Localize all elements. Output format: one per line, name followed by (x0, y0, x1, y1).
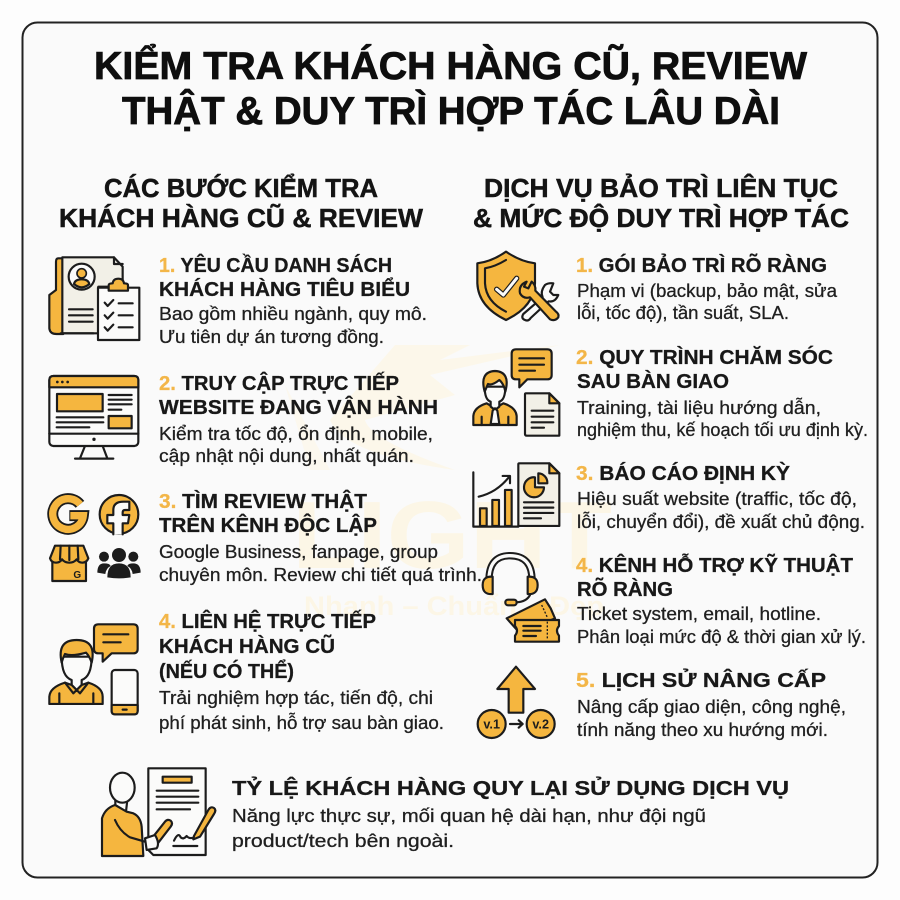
icon: upgrade arrow v1 to v2: v.1 (483, 718, 500, 732)
text: right step 2: nghiệm thu, kế hoạch tối ưu định kỳ. (577, 419, 868, 440)
icon: facebook (100, 495, 138, 534)
icon: upgrade arrow v1 to v2 (478, 667, 555, 738)
text: right step 3: 3. BÁO CÁO ĐỊNH KỲ (576, 461, 790, 485)
text: left step 1 (159, 253, 427, 347)
text: returning customers: TỶ LỆ KHÁCH HÀNG QUY LẠI SỬ DỤNG DỊCH VỤ (232, 776, 789, 800)
text: right step 4: 4. KÊNH HỖ TRỢ KỸ THUẬT (576, 553, 853, 577)
text: right step 4: Ticket system, email, hotline. (577, 603, 821, 624)
icon: upgrade arrow v1 to v2: v.2 (532, 718, 549, 732)
text: left step 2: cập nhật nội dung, nhất quán. (159, 445, 414, 466)
icon: support person with chat and document (473, 349, 559, 436)
text: left step 3: chuyên môn. Review chi tiết quá trình. (159, 564, 482, 585)
text: right step 3 (576, 461, 865, 532)
heading: left column (59, 173, 423, 233)
icon: website on monitor (49, 376, 138, 459)
text: right step 4: Phân loại mức độ & thời gian xử lý. (577, 626, 866, 647)
text: left step 4: KHÁCH HÀNG CŨ (159, 634, 335, 658)
text: left step 2: Kiểm tra tốc độ, ổn định, mobile, (159, 423, 433, 444)
text: right step 4 (576, 553, 866, 647)
text: left step 3: 3. TÌM REVIEW THẬT (159, 489, 367, 513)
heading: right column: & MỨC ĐỘ DUY TRÌ HỢP TÁC (473, 203, 849, 233)
text: left step 1: Ưu tiên dự án tương đồng. (159, 326, 384, 347)
text: right step 5: Nâng cấp giao diện, công nghệ, (577, 696, 846, 717)
text: right step 2 (576, 345, 868, 440)
text: right step 2: 2. QUY TRÌNH CHĂM SÓC (576, 345, 833, 369)
watermark: faint logo (285, 345, 612, 621)
icon: shield and tools (477, 252, 559, 321)
icon: people group (97, 548, 141, 578)
heading: right column: DỊCH VỤ BẢO TRÌ LIÊN TỤC (484, 173, 838, 203)
text: right step 1: Phạm vi (backup, bảo mật, sửa (577, 280, 838, 301)
icon: growth chart and report (473, 463, 559, 527)
text: left step 2: WEBSITE ĐANG VẬN HÀNH (159, 395, 438, 419)
icon: storefront: G (73, 570, 81, 581)
text: left step 1: Bao gồm nhiều ngành, quy mô. (159, 303, 427, 324)
text: returning customers: product/tech bên ngoài. (232, 830, 454, 851)
watermark: faint logo: LIGHT (292, 482, 612, 589)
text: right step 5: tính năng theo xu hướng mới. (577, 719, 828, 740)
text: left step 2 (159, 371, 438, 466)
text: right step 4: RÕ RÀNG (577, 577, 673, 601)
text: right step 5: 5. LỊCH SỬ NÂNG CẤP (576, 668, 826, 692)
text: right step 2: SAU BÀN GIAO (577, 370, 729, 393)
text: left step 4: (NẾU CÓ THỂ) (159, 659, 294, 683)
text: left step 3: Google Business, fanpage, group (159, 541, 438, 562)
watermark: faint logo: Nhanh – Chuẩn – Đẹp (304, 591, 604, 621)
text: returning customers: Năng lực thực sự, mối quan hệ dài hạn, như đội ngũ (232, 805, 706, 826)
text: left step 4 (159, 609, 444, 733)
text: left step 3: TRÊN KÊNH ĐỘC LẬP (159, 513, 377, 537)
text: returning customers (232, 776, 789, 851)
title: THẬT & DUY TRÌ HỢP TÁC LÂU DÀI (122, 89, 780, 133)
text: right step 1: lỗi, tốc độ), tần suất, SLA. (577, 302, 789, 323)
icon: person signing document (102, 768, 215, 856)
text: right step 3: Hiệu suất website (traffic, tốc độ, (577, 488, 857, 509)
title (94, 43, 807, 133)
text: left step 4: phí phát sinh, hỗ trợ sau bàn giao. (159, 712, 444, 733)
text: left step 1: KHÁCH HÀNG TIÊU BIỂU (159, 277, 410, 301)
text: left step 2: 2. TRUY CẬP TRỰC TIẾP (159, 371, 399, 395)
icon: person with chat and phone (49, 624, 138, 714)
text: left step 3 (159, 489, 482, 585)
icon: review channels (50, 495, 141, 581)
text: right step 2: Training, tài liệu hướng dẫn, (577, 397, 821, 418)
icon: google (53, 499, 83, 529)
heading: left column: KHÁCH HÀNG CŨ & REVIEW (59, 203, 423, 233)
text: right step 5 (576, 668, 846, 740)
heading: right column (473, 173, 849, 233)
text: left step 1: 1. YÊU CẦU DANH SÁCH (159, 253, 392, 277)
text: right step 1 (576, 253, 838, 323)
title: KIỂM TRA KHÁCH HÀNG CŨ, REVIEW (94, 43, 807, 88)
icon: folder and clipboard (49, 257, 139, 340)
text: left step 4: 4. LIÊN HỆ TRỰC TIẾP (159, 609, 376, 633)
text: left step 4: Trải nghiệm hợp tác, tiến độ, chi (159, 687, 433, 708)
text: right step 1: 1. GÓI BẢO TRÌ RÕ RÀNG (576, 253, 827, 277)
icon: headset and tickets (483, 556, 559, 642)
text: right step 3: lỗi, chuyển đổi), đề xuất chủ động. (577, 511, 865, 532)
heading: left column: CÁC BƯỚC KIỂM TRA (104, 173, 378, 203)
